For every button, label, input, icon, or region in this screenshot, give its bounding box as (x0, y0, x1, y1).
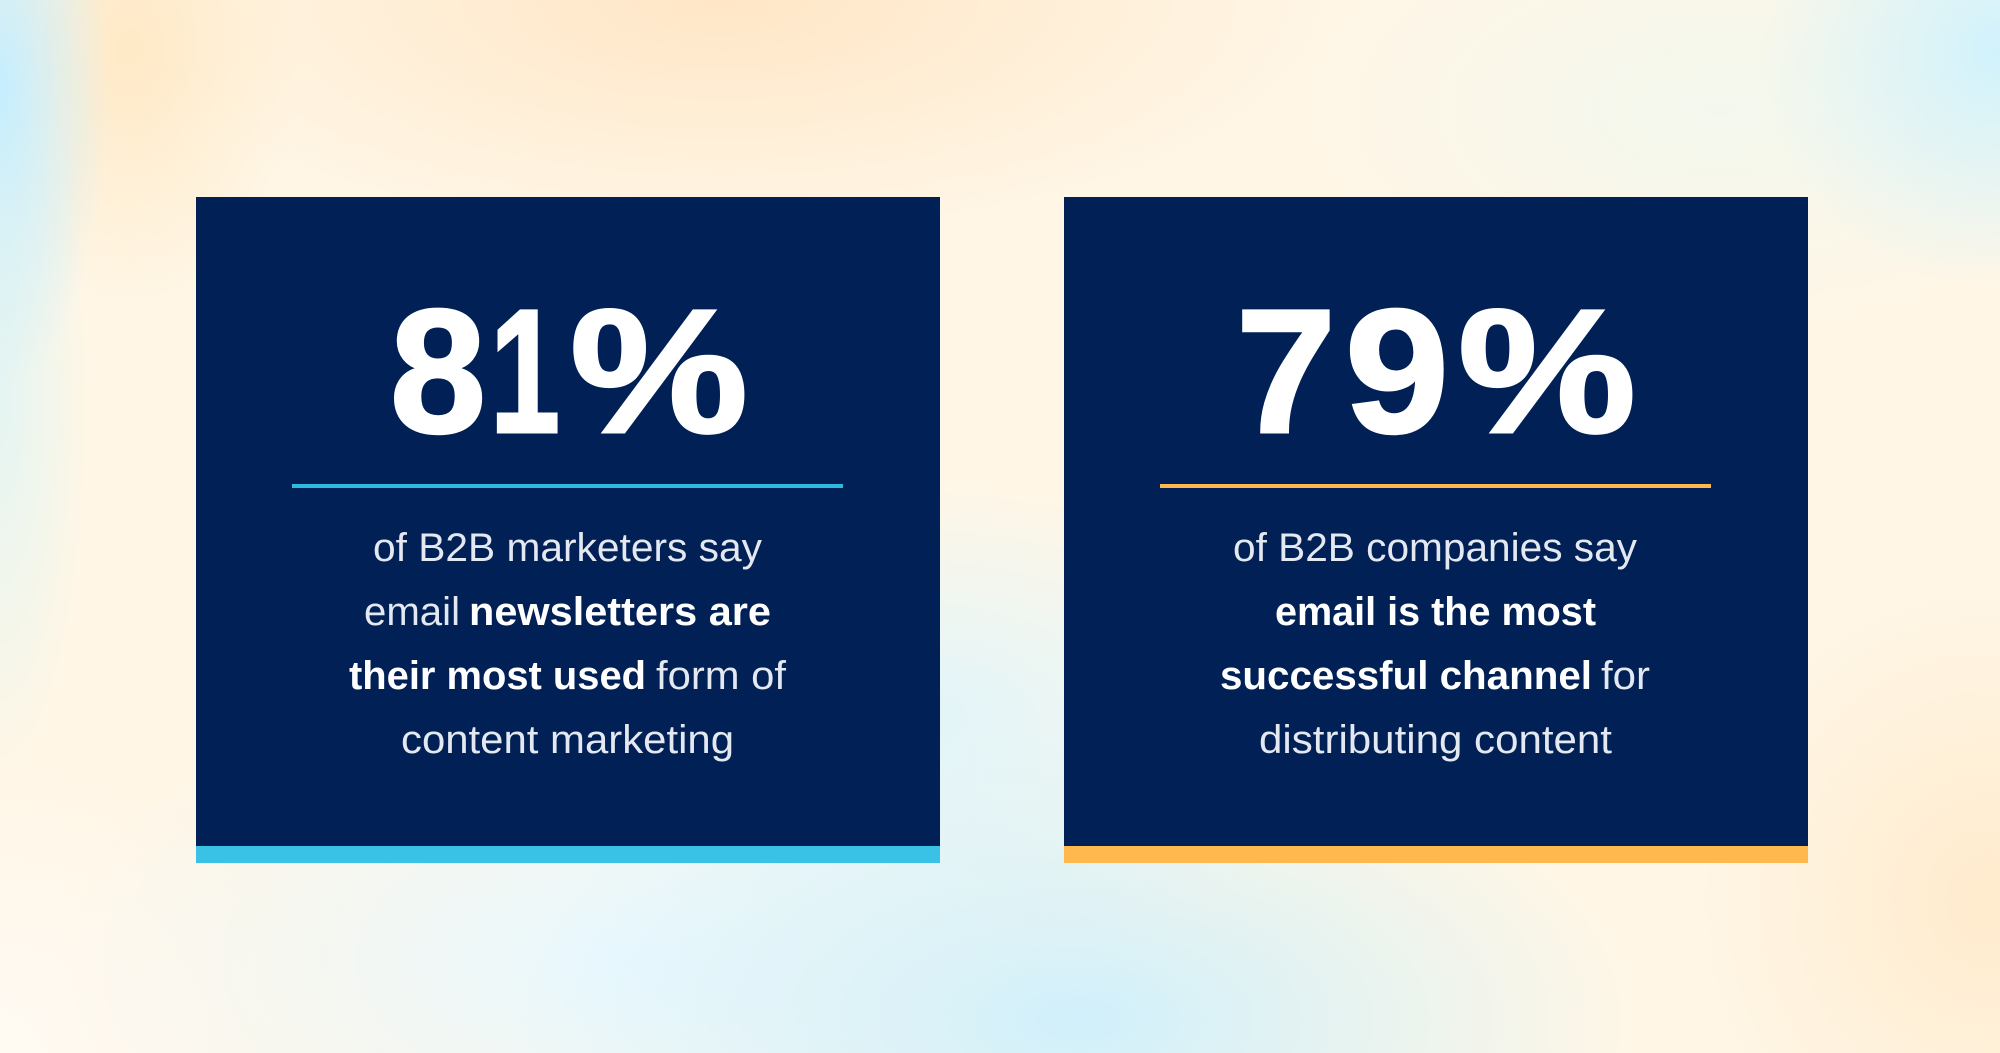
panel background (1064, 197, 1808, 863)
description text: of B2B companies say (1233, 526, 1637, 570)
big number: 81%: % (570, 274, 748, 470)
panel: 79% channel stat (1064, 197, 1808, 863)
accent bar: orange (1064, 846, 1808, 863)
description text: email is the most (1275, 590, 1596, 634)
description text: successful channel (1220, 654, 1592, 698)
divider line: blue (292, 484, 843, 488)
panel background (196, 197, 940, 863)
divider line: orange (1160, 484, 1711, 488)
description text: distributing content (1259, 718, 1612, 762)
description text: for (1601, 654, 1650, 698)
description text (349, 526, 787, 762)
big number: 79%: 9 (1345, 274, 1449, 470)
description text: of B2B marketers say (373, 526, 762, 570)
big number: 81% (390, 274, 748, 470)
accent bar: blue (196, 846, 940, 863)
description text: newsletters are (469, 590, 771, 634)
description text: content marketing (401, 718, 734, 762)
big number: 79%: 7 (1236, 274, 1336, 470)
description text: email (364, 590, 460, 634)
description text (1220, 526, 1650, 762)
big number: 81%: 8 (390, 274, 486, 470)
description text: their most used (349, 654, 646, 698)
description text: form of (656, 654, 787, 698)
big number: 79% (1236, 274, 1636, 470)
big number: 79%: % (1458, 274, 1636, 470)
big number: 81%: 1 (490, 274, 560, 470)
panel: 81% newsletters stat (196, 197, 940, 863)
